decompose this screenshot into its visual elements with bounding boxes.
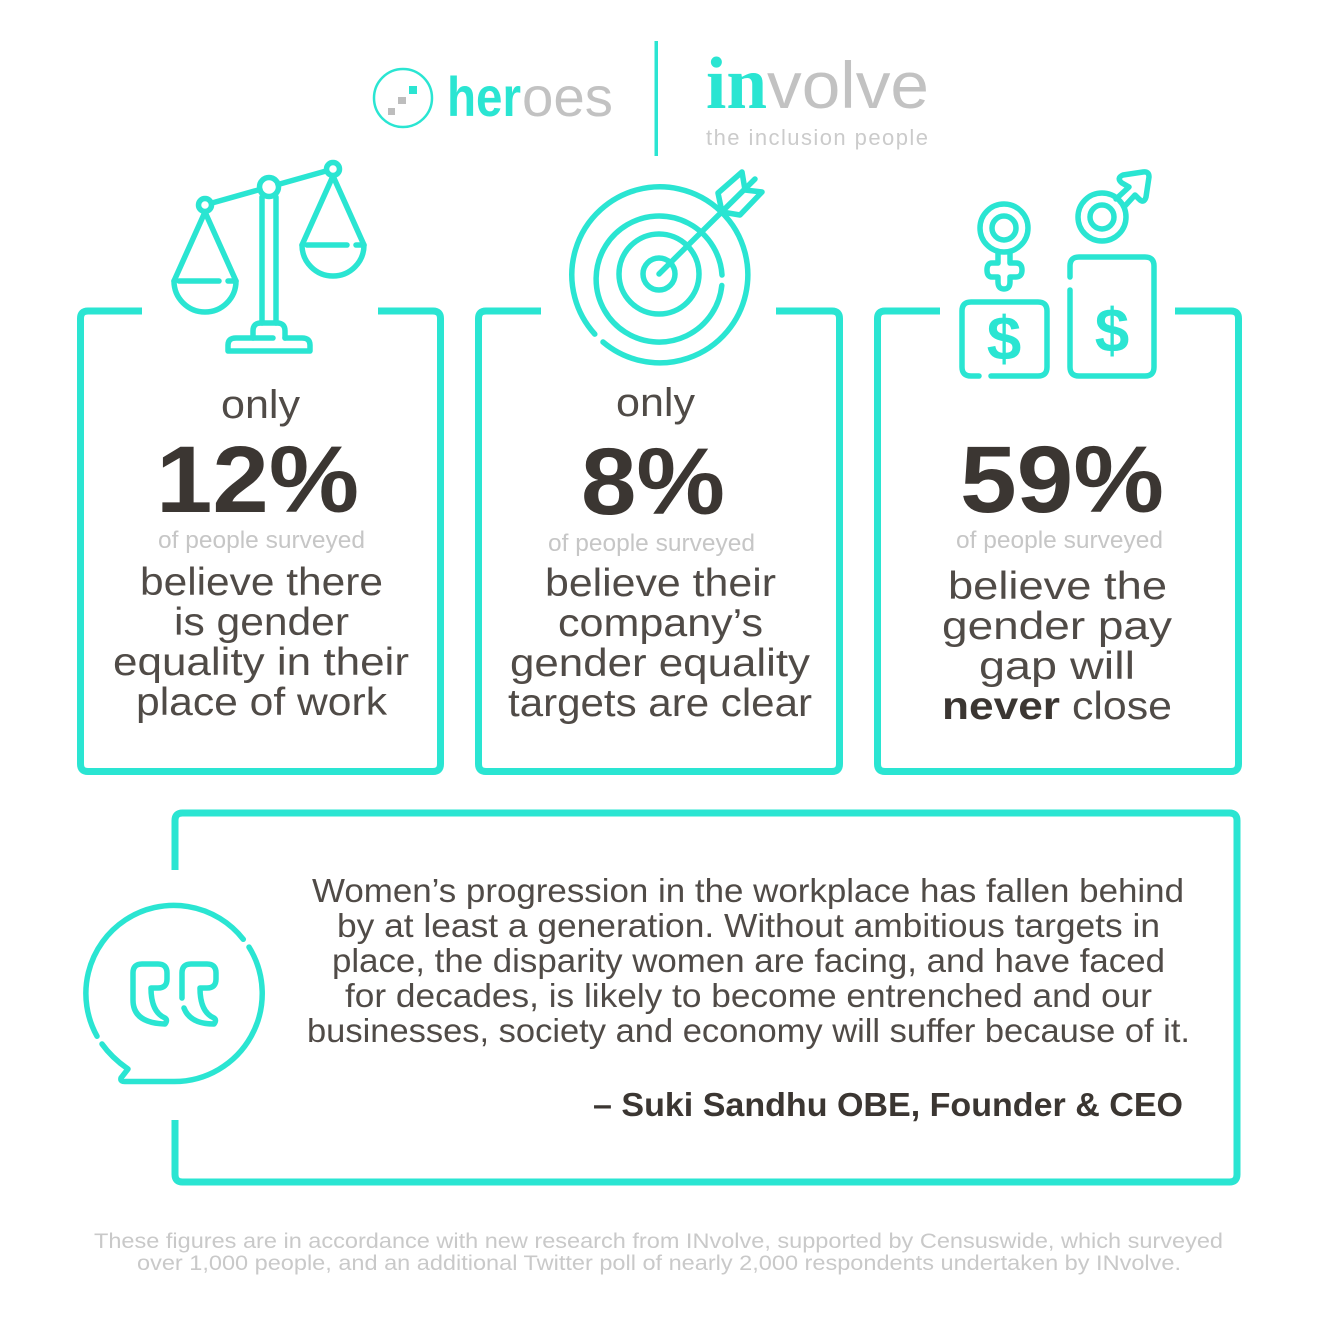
icon: male symbol bbox=[1078, 172, 1149, 241]
panel frame bbox=[175, 813, 1237, 1182]
logo: heroes bbox=[374, 65, 613, 128]
text: quote: for decades, is likely to become entrenched and our bbox=[345, 977, 1152, 1014]
text: of people surveyed: of people surveyed bbox=[158, 527, 365, 554]
panel frame bbox=[80, 311, 440, 772]
stat: 8%: 8% bbox=[581, 429, 725, 535]
text: statement bbox=[508, 562, 812, 725]
wordmark: heroes bbox=[447, 65, 613, 128]
wordmark: involve bbox=[706, 43, 929, 125]
wordmark: heroes: oes bbox=[522, 65, 613, 128]
icon: female symbol bbox=[980, 204, 1028, 289]
text: statement: gender pay bbox=[942, 605, 1173, 648]
logo: involve bbox=[706, 43, 929, 150]
icon: target with arrow bbox=[572, 172, 762, 363]
stat: 12%: 12% bbox=[156, 427, 359, 533]
panel frame bbox=[878, 311, 1238, 772]
footnote: over 1,000 people, and an additional Twitter poll of nearly 2,000 respondents undertaken by INvolve. bbox=[137, 1252, 1181, 1275]
text: statement: gap will bbox=[979, 645, 1135, 688]
text: of people surveyed: of people surveyed bbox=[956, 527, 1163, 554]
wordmark: involve: volve bbox=[767, 48, 929, 122]
panel: quote bbox=[86, 813, 1237, 1182]
text: statement: gender equality bbox=[510, 642, 811, 685]
text: of people surveyed: of people surveyed bbox=[548, 530, 755, 557]
icon: speech bubble with quote marks bbox=[86, 905, 262, 1082]
text: statement: close bbox=[1072, 685, 1172, 728]
text: attribution: – Suki Sandhu OBE, Founder & CEO bbox=[593, 1086, 1183, 1123]
footnote bbox=[94, 1230, 1223, 1275]
text: quote: businesses, society and economy will suffer because of it. bbox=[307, 1012, 1190, 1049]
icon: tall dollar column: $ bbox=[1095, 297, 1129, 366]
text: statement: believe there bbox=[140, 561, 383, 604]
icon: tall dollar column bbox=[1070, 257, 1154, 376]
stat: 59%: 59% bbox=[960, 427, 1164, 533]
text: statement bbox=[942, 565, 1173, 728]
text: statement: targets are clear bbox=[508, 682, 812, 725]
panel: 8% clear targets bbox=[478, 172, 840, 772]
text: quote: Women’s progression in the workplace has fallen behind bbox=[312, 872, 1184, 909]
panel: 12% equality at work bbox=[80, 162, 440, 772]
icon: small dollar column bbox=[962, 302, 1047, 376]
wordmark: involve: in bbox=[706, 43, 767, 125]
text: quote: by at least a generation. Without ambitious targets in bbox=[337, 907, 1160, 944]
text: quote bbox=[307, 872, 1190, 1049]
panel: 59% pay gap bbox=[878, 172, 1238, 771]
tagline: the inclusion people bbox=[706, 125, 928, 150]
text: statement: never bbox=[942, 685, 1060, 728]
icon: scales bbox=[174, 162, 364, 351]
text: quote: place, the disparity women are facing, and have faced bbox=[332, 942, 1165, 979]
text: statement: company’s bbox=[558, 602, 763, 645]
icon: heroes circle bbox=[374, 69, 432, 127]
text: statement: believe the bbox=[948, 565, 1167, 608]
text: statement: is gender bbox=[174, 601, 349, 644]
icon: gender pay gap bbox=[962, 172, 1154, 376]
text: statement: place of work bbox=[136, 681, 388, 724]
text: only: only bbox=[616, 381, 695, 425]
text: statement: believe their bbox=[545, 562, 776, 605]
text: statement: equality in their bbox=[113, 641, 409, 684]
icon: small dollar column: $ bbox=[987, 305, 1021, 374]
logo divider bbox=[654, 41, 658, 156]
text: only: only bbox=[221, 383, 300, 427]
footnote: These figures are in accordance with new research from INvolve, supported by Censuswide, which surveyed bbox=[94, 1230, 1223, 1253]
wordmark: heroes: her bbox=[447, 65, 521, 128]
text: statement bbox=[113, 561, 409, 724]
panel frame bbox=[478, 311, 840, 772]
